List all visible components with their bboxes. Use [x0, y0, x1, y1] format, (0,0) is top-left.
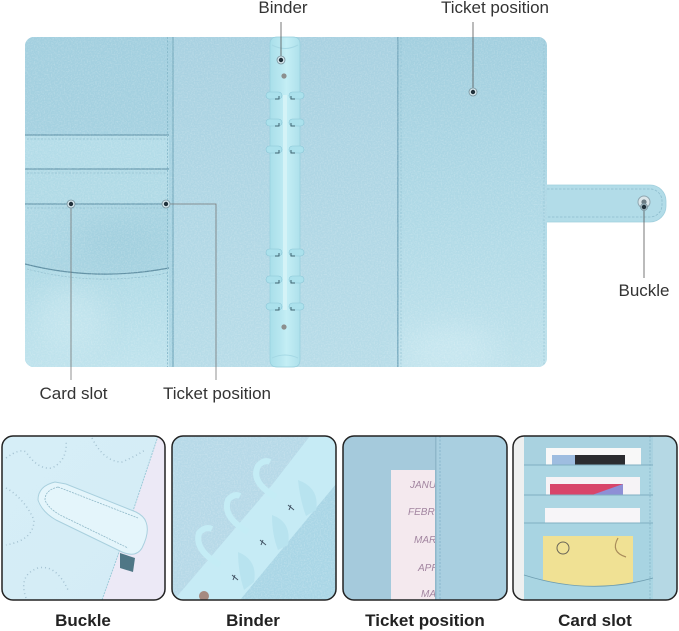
panel: Ticket position detail: APR	[417, 563, 439, 574]
panel: Card slot detail	[513, 436, 677, 600]
callout: Card slot	[39, 200, 108, 403]
right panel	[397, 37, 547, 374]
panel: Ticket position detail: MAR	[414, 535, 436, 546]
panel: Ticket position detail: JANU	[409, 480, 437, 491]
left panel	[25, 37, 174, 367]
binder cover base	[25, 37, 547, 367]
panel: Buckle detail	[2, 436, 165, 600]
callout: Buckle	[618, 203, 670, 300]
callout: Buckle: Buckle	[618, 281, 670, 300]
pockets	[25, 135, 169, 169]
panel: Binder detail	[172, 436, 336, 601]
callout: Ticket position top	[441, 0, 549, 96]
caption: Buckle: Buckle	[55, 611, 111, 630]
callout: Card slot: Card slot	[39, 384, 108, 403]
panel: Ticket position detail	[343, 436, 507, 600]
leather grain	[25, 37, 547, 367]
callout: Ticket position left: Ticket position	[163, 384, 271, 403]
panel: Ticket position detail: MA	[421, 589, 436, 600]
binder spine with rings	[266, 37, 304, 367]
binder photo: open planner	[25, 37, 666, 374]
panel: Ticket position detail: FEBRU	[408, 507, 443, 518]
caption: Binder: Binder	[226, 611, 280, 630]
caption: Ticket position: Ticket position	[365, 611, 485, 630]
callout: Binder	[258, 0, 308, 64]
caption: Card slot: Card slot	[558, 611, 632, 630]
callout: Ticket position left	[162, 200, 271, 403]
strap with buckle	[530, 185, 666, 222]
